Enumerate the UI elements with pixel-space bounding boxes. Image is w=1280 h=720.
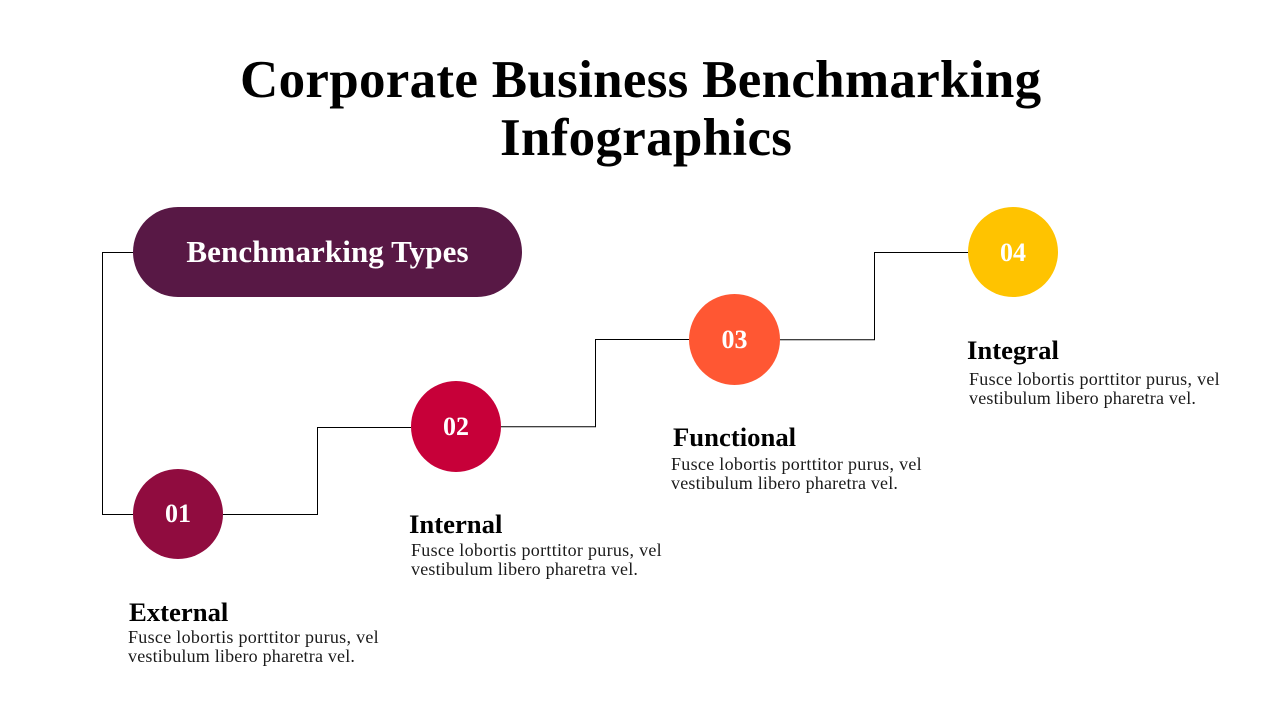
circle 02 [411,381,501,472]
heading: Internal: Internal [409,509,502,539]
text: Functional [671,454,922,493]
text: Internal [411,540,662,579]
title: Corporate Business Benchmarking [240,51,1041,109]
heading: External: External [129,597,228,627]
text: External [128,627,379,666]
circle 01 [133,469,223,559]
text: Integral: Fusce lobortis porttitor purus, vel [969,369,1220,389]
circle 02: 02 [443,412,469,441]
circle 04 [968,207,1058,297]
circle 03 [689,294,780,385]
heading: Functional: Functional [673,422,796,452]
pill: Benchmarking Types [133,207,522,297]
title [240,51,1041,167]
circle 03: 03 [722,325,748,354]
text: Internal: vestibulum libero pharetra vel. [411,559,638,579]
text: Internal: Fusce lobortis porttitor purus, vel [411,540,662,560]
text: External: Fusce lobortis porttitor purus, vel [128,627,379,647]
circle 04: 04 [1000,238,1026,267]
heading: Integral: Integral [967,335,1059,365]
title: Infographics [500,109,792,167]
circle 01: 01 [165,499,191,528]
text: Functional: vestibulum libero pharetra vel. [671,473,898,493]
text: Integral: vestibulum libero pharetra vel. [969,388,1196,408]
text: Functional: Fusce lobortis porttitor purus, vel [671,454,922,474]
pill: Benchmarking Types: Benchmarking Types [186,234,469,269]
text: External: vestibulum libero pharetra vel. [128,646,355,666]
text: Integral [969,369,1220,408]
